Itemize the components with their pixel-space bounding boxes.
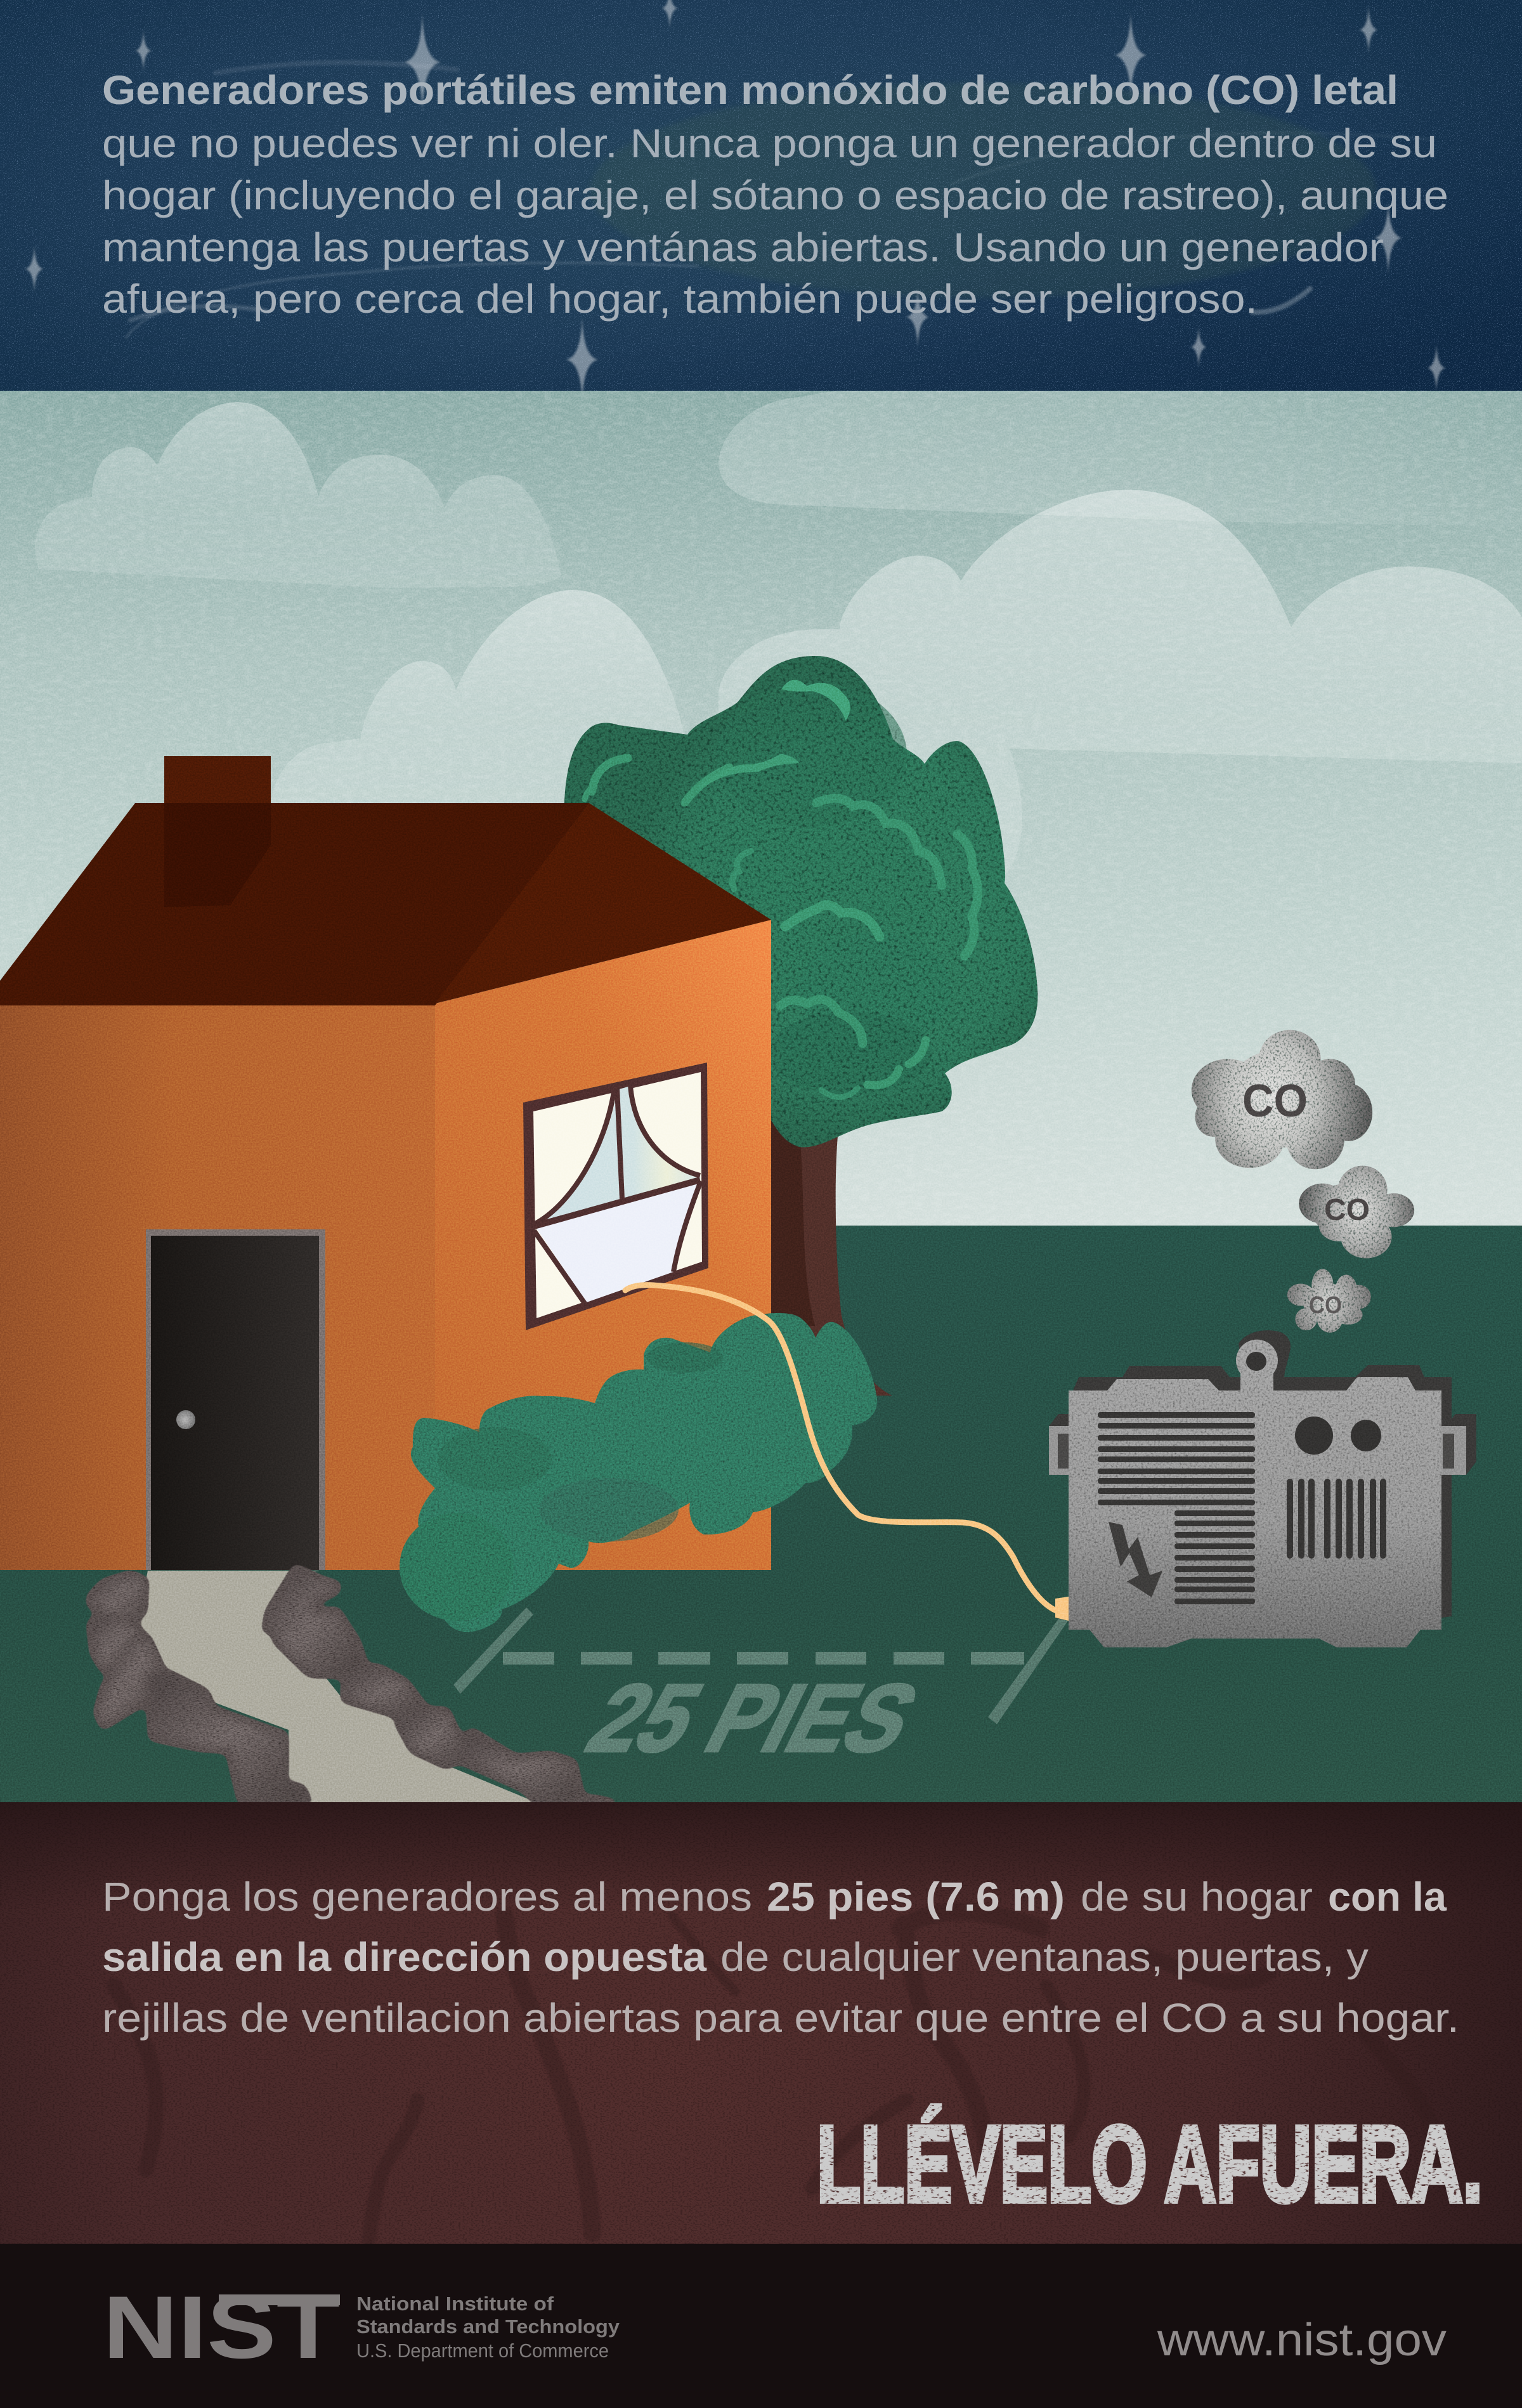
body lines: que no puedes ver ni oler. Nunca ponga un generador dentro de su: [102, 121, 1437, 166]
panel: ground: [0, 1226, 1522, 1802]
cloud: large right: [719, 490, 1522, 888]
organisation name: National Institute of: [356, 2293, 554, 2315]
icon: lightning bolt: [1109, 1522, 1162, 1597]
sky texture: [0, 391, 1522, 1228]
tree highlights: [698, 680, 978, 1097]
tree trunk: [761, 1104, 892, 1396]
label: 25 PIES: 25 PIES: [572, 1665, 935, 1771]
text block: placement advice: rejillas de ventilacion abiertas para evitar que entre el CO a su hogar.: [102, 1995, 1459, 2041]
texture overlay: [0, 391, 1522, 1802]
bush: [400, 1313, 877, 1632]
text block: header warning: [102, 67, 1448, 322]
body lines: hogar (incluyendo el garaje, el sótano o espacio de rastreo), aunque: [102, 173, 1448, 218]
cloud: upper right: [719, 391, 1522, 527]
organisation name: U.S. Department of Commerce: [356, 2339, 609, 2362]
chimney: [164, 756, 271, 807]
door knob: [176, 1410, 195, 1429]
cloud: upper left: [35, 402, 561, 588]
website: www.nist.gov: [1157, 2315, 1447, 2365]
heading line: Generadores portátiles emiten monóxido de carbono (CO) letal: [102, 67, 1398, 113]
generator vents: [1098, 1412, 1386, 1604]
generator body: [1069, 1340, 1441, 1647]
extension cord: [625, 1285, 1069, 1621]
generator: [1049, 1330, 1476, 1647]
body lines: [102, 121, 1448, 322]
panel: brown footer band: [0, 1802, 1522, 2244]
generator knobs: [1295, 1417, 1333, 1455]
rocks: [89, 1567, 615, 1802]
distance marker: 25 pies: [453, 1607, 1068, 1771]
text block: placement advice: salida en la dirección opuesta: [102, 1934, 706, 1980]
tree highlights left: [585, 758, 729, 802]
generator shadow: [1049, 1330, 1476, 1619]
stars: [25, 0, 1446, 404]
panel: daytime sky: [0, 391, 1522, 1228]
CO label large: CO: [1242, 1076, 1308, 1127]
CO cloud large: [1192, 1030, 1372, 1169]
house side wall: [435, 920, 771, 1570]
CO cloud medium: [1299, 1166, 1414, 1259]
walkway: [138, 1571, 536, 1802]
body lines: mantenga las puertas y ventánas abiertas. Usando un generador: [102, 225, 1384, 270]
panel: black footer: [0, 2244, 1522, 2408]
text block: placement advice: [102, 1874, 1459, 2041]
NIST logo: NIST: [103, 2277, 340, 2377]
cord plug: [1055, 1597, 1069, 1621]
text block: placement advice: Ponga los generadores al menos: [102, 1874, 752, 1920]
generator handles: [1049, 1426, 1070, 1475]
organisation name: Standards and Technology: [356, 2315, 620, 2338]
CO label medium: CO: [1324, 1193, 1370, 1227]
tree: [564, 656, 1037, 1396]
body lines: afuera, pero cerca del hogar, también puede ser peligroso.: [102, 276, 1258, 322]
cloud: centre behind house: [271, 590, 704, 818]
chimney shadow: [164, 803, 271, 907]
tree canopy: [564, 656, 1037, 1147]
organisation name: [356, 2293, 620, 2362]
roof: [0, 803, 589, 1005]
swooshes: [126, 63, 1433, 337]
text block: placement advice: de cualquier ventanas, puertas, y: [720, 1934, 1369, 1980]
generator lug hole: [1246, 1352, 1266, 1371]
house front wall: [0, 1005, 435, 1570]
panel: night sky header: [0, 0, 1522, 404]
window: [523, 1063, 708, 1330]
CO cloud small: [1287, 1269, 1371, 1333]
door: [151, 1236, 319, 1570]
text block: placement advice: de su hogar: [1081, 1874, 1313, 1920]
door frame: [146, 1229, 325, 1570]
text block: placement advice: 25 pies (7.6 m): [767, 1874, 1065, 1920]
text block: placement advice: con la: [1328, 1874, 1447, 1920]
house: [0, 756, 771, 1570]
roof gable: [435, 803, 771, 1004]
brush strokes: [114, 1912, 1440, 2239]
CO clouds: [1192, 1030, 1414, 1333]
CO label small: CO: [1309, 1292, 1342, 1319]
